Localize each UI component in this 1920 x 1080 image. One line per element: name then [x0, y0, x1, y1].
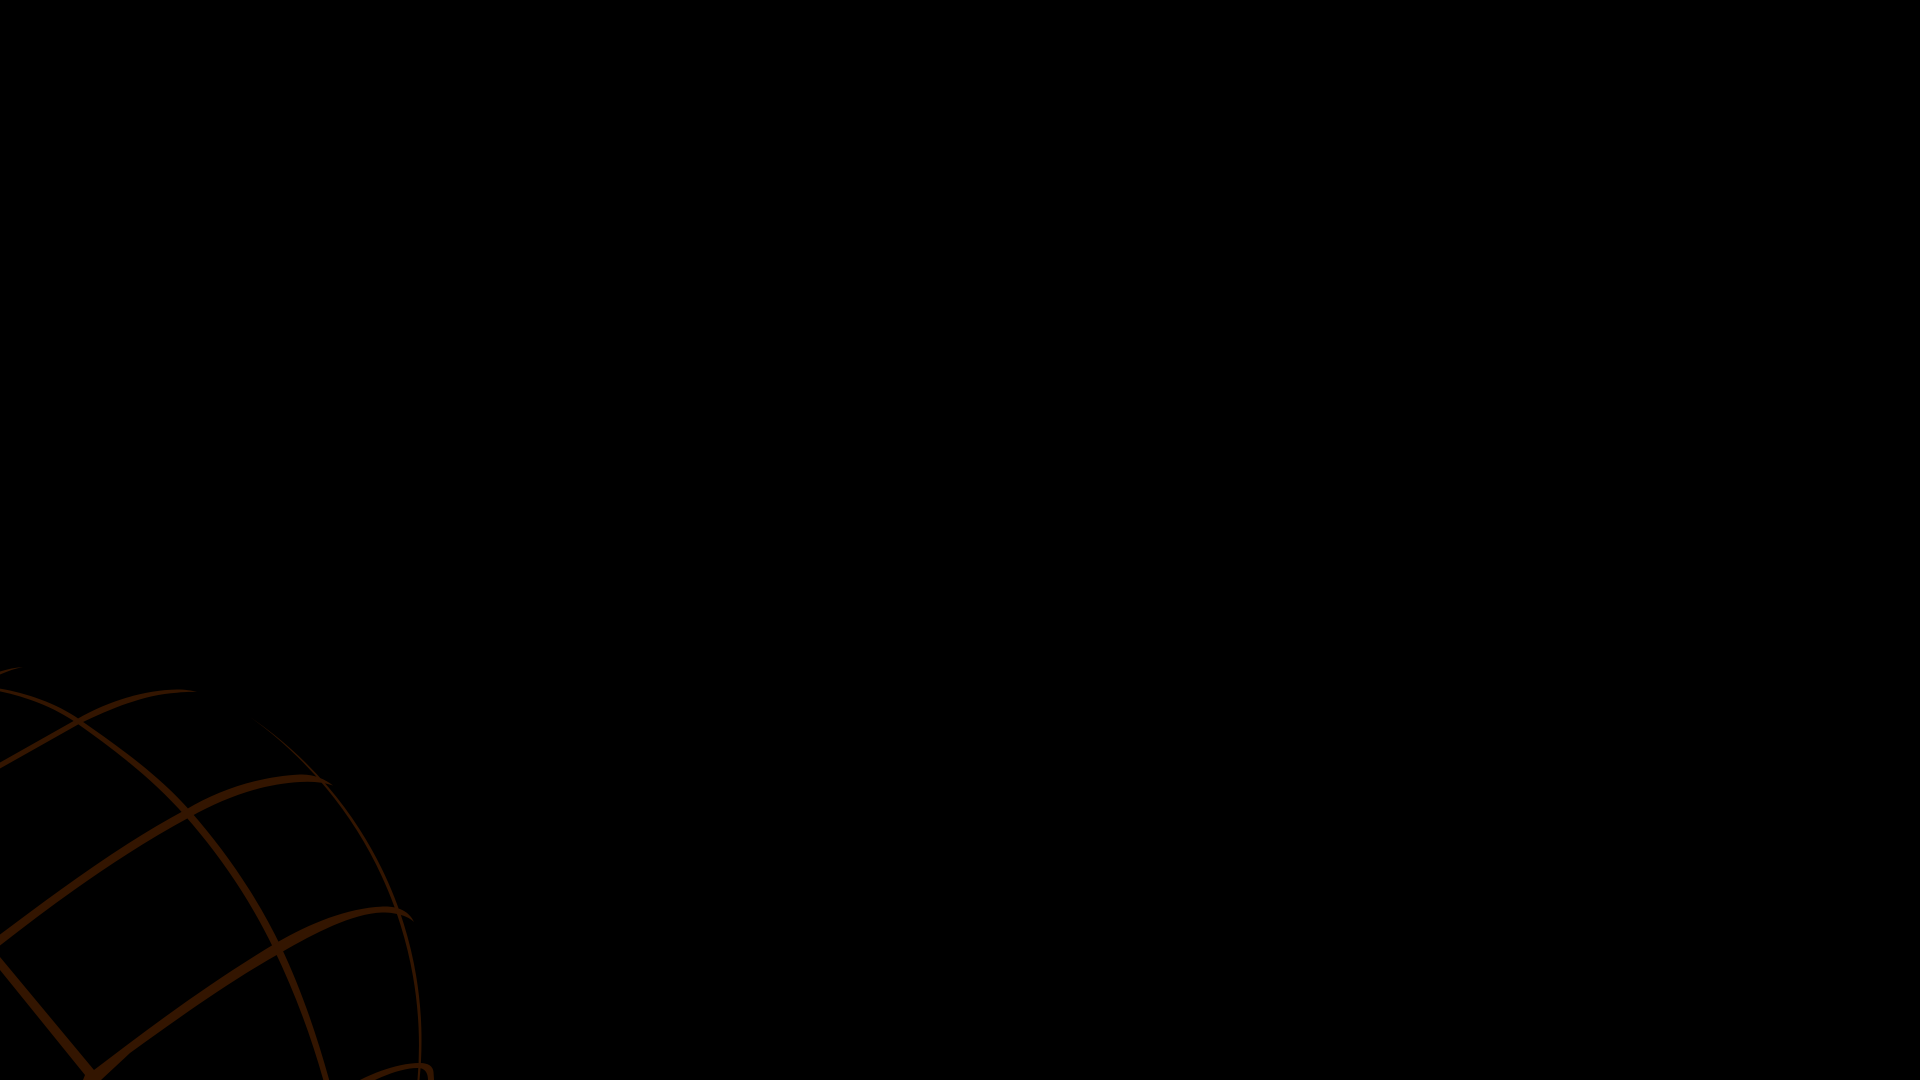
globe: main meridian	[0, 689, 329, 1080]
globe: latitude line 3	[83, 906, 414, 1080]
globe: latitude line 4	[360, 1063, 434, 1080]
globe: latitude line 2	[0, 774, 333, 946]
globe: outer rim arc	[250, 717, 422, 1080]
globe: latitude line 1	[0, 690, 197, 768]
globe: top latitude fragment	[0, 667, 23, 674]
globe: diagonal meridian	[0, 957, 101, 1080]
